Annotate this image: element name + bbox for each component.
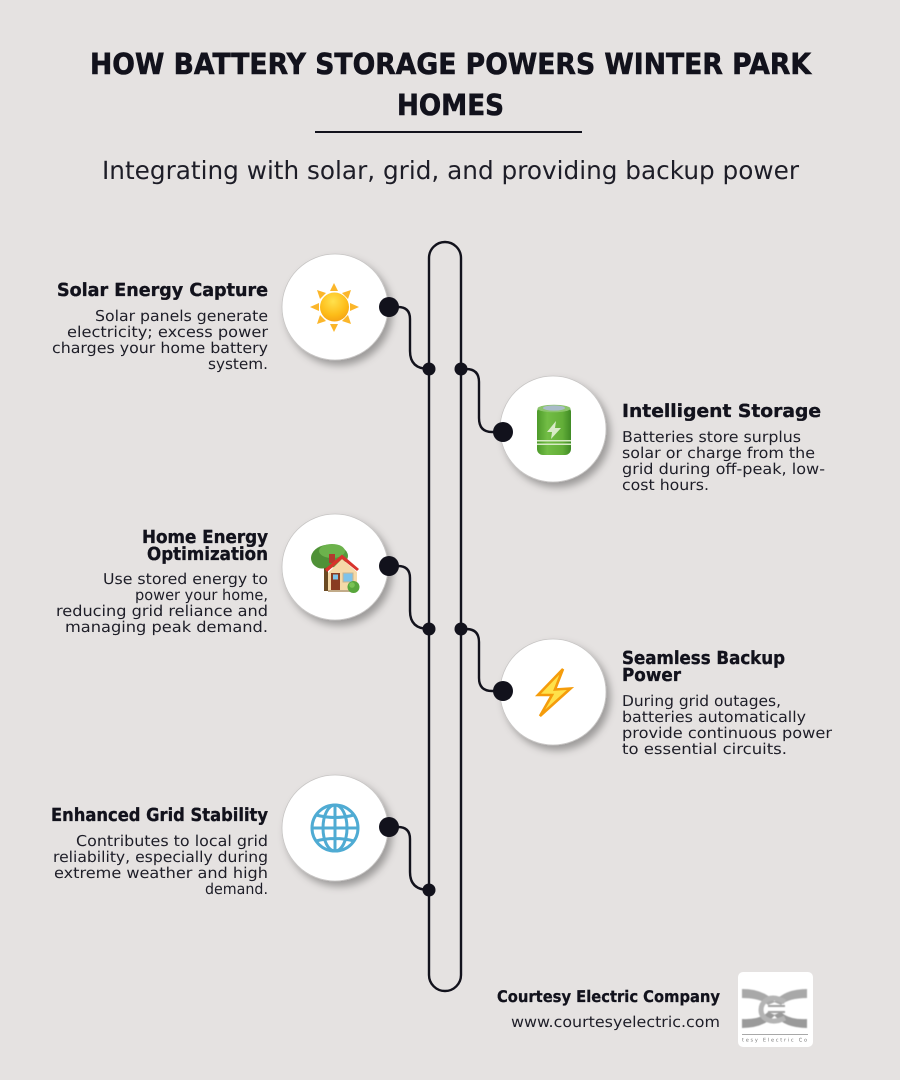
grid description: extreme weather and high [54, 864, 268, 882]
backup description: provide continuous power [622, 724, 833, 742]
icon: lightning bolt [538, 669, 570, 716]
icon: house with tree [311, 544, 360, 593]
grid circle [282, 775, 388, 881]
grid description: Contributes to local grid [76, 832, 268, 850]
panel: intelligent storage [454, 362, 825, 494]
grid heading: Enhanced Grid Stability [51, 805, 268, 826]
backup heading: Seamless Backup [622, 648, 785, 669]
icon: battery [537, 405, 571, 455]
backup description: batteries automatically [622, 708, 806, 726]
solar connector [379, 297, 436, 376]
backup description: to essential circuits. [622, 740, 787, 758]
solar description: system. [208, 355, 268, 373]
central timeline track [429, 242, 461, 991]
grid description: demand. [205, 880, 268, 898]
icon: sun [310, 283, 359, 332]
home heading: Optimization [147, 544, 268, 565]
title [90, 47, 812, 122]
storage description: grid during off-peak, low- [622, 460, 825, 478]
grid description: reliability, especially during [53, 848, 268, 866]
backup heading: Power [622, 665, 681, 686]
storage description [622, 428, 825, 494]
solar description: charges your home battery [52, 339, 268, 357]
title: HOMES [397, 88, 504, 122]
panel: solar energy capture [52, 254, 436, 376]
footer company credit [497, 987, 721, 1031]
home heading: Home Energy [142, 527, 268, 548]
solar circle [282, 254, 388, 360]
title underline [315, 131, 582, 133]
solar description: electricity; excess power [67, 323, 269, 341]
panel: seamless backup power [454, 622, 833, 758]
home connector [379, 556, 436, 636]
logo: tesy Electric Co [742, 1038, 807, 1044]
solar description [52, 307, 269, 373]
title: HOW BATTERY STORAGE POWERS WINTER PARK [90, 47, 812, 81]
subtitle: Integrating with solar, grid, and providing backup power [102, 156, 800, 185]
footer company credit: www.courtesyelectric.com [511, 1013, 720, 1031]
backup connector [454, 622, 513, 701]
logo [738, 972, 813, 1047]
home description: Use stored energy to [103, 570, 268, 588]
solar heading: Solar Energy Capture [57, 280, 268, 301]
storage circle [500, 376, 606, 482]
grid connector [379, 817, 436, 896]
solar description: Solar panels generate [95, 307, 268, 325]
icon: globe [312, 805, 358, 851]
home circle [282, 514, 388, 620]
grid description [53, 832, 268, 898]
backup description: During grid outages, [622, 692, 781, 710]
home description: managing peak demand. [65, 618, 268, 636]
backup circle [500, 639, 606, 745]
storage description: cost hours. [622, 476, 709, 494]
panel: home energy optimization [56, 514, 436, 636]
backup heading [622, 648, 785, 686]
home description: reducing grid reliance and [56, 602, 268, 620]
home heading [142, 527, 268, 565]
home description: power your home, [135, 586, 268, 604]
storage description: Batteries store surplus [622, 428, 801, 446]
storage description: solar or charge from the [622, 444, 815, 462]
backup description [622, 692, 833, 758]
panel: enhanced grid stability [51, 775, 436, 898]
home description [56, 570, 268, 636]
footer company credit: Courtesy Electric Company [497, 987, 721, 1006]
storage heading: Intelligent Storage [622, 401, 821, 422]
storage connector [454, 362, 513, 442]
